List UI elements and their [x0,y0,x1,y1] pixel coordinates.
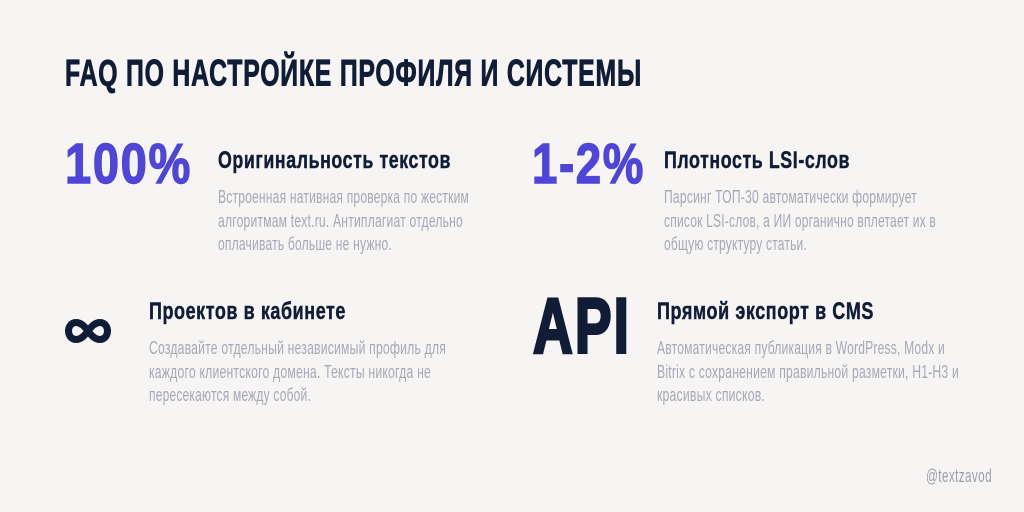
heading: projects in account: Проектов в кабинете [149,298,346,325]
text block: LSI density description [664,187,936,254]
text block: projects description: каждого клиентского домена. Тексты никогда не [149,362,431,382]
stat: 100%: 100% [65,132,192,196]
panel: projects in account [68,298,446,405]
heading: LSI density: Плотность LSI-слов [664,147,850,174]
text block: text originality description: оплачивать больше не нужно. [218,234,392,254]
panel: text originality [65,132,469,254]
panel: LSI density [532,132,936,254]
heading: text originality: Оригинальность текстов [218,147,451,174]
text block: projects description: пересекаются между собой. [149,385,311,405]
text block: text originality description: алгоритмам text.ru. Антиплагиат отдельно [218,211,463,231]
heading: CMS export: Прямой экспорт в CMS [657,298,874,325]
panel: CMS export [533,282,959,405]
text block: LSI density description: общую структуру статьи. [664,234,807,254]
text block: CMS export description [657,338,959,405]
stat: 1-2%: 1-2% [532,132,645,196]
text block: text originality description [218,187,469,254]
text block: projects description [149,338,446,405]
text block: projects description: Создавайте отдельный независимый профиль для [149,338,446,358]
title: FAQ ПО НАСТРОЙКЕ ПРОФИЛЯ И СИСТЕМЫ [65,52,642,94]
icon: infinity [68,322,108,340]
text block: CMS export description: красивых списков. [657,385,765,405]
text block: text originality description: Встроенная нативная проверка по жестким [218,187,469,207]
stat: API: API [533,282,631,370]
